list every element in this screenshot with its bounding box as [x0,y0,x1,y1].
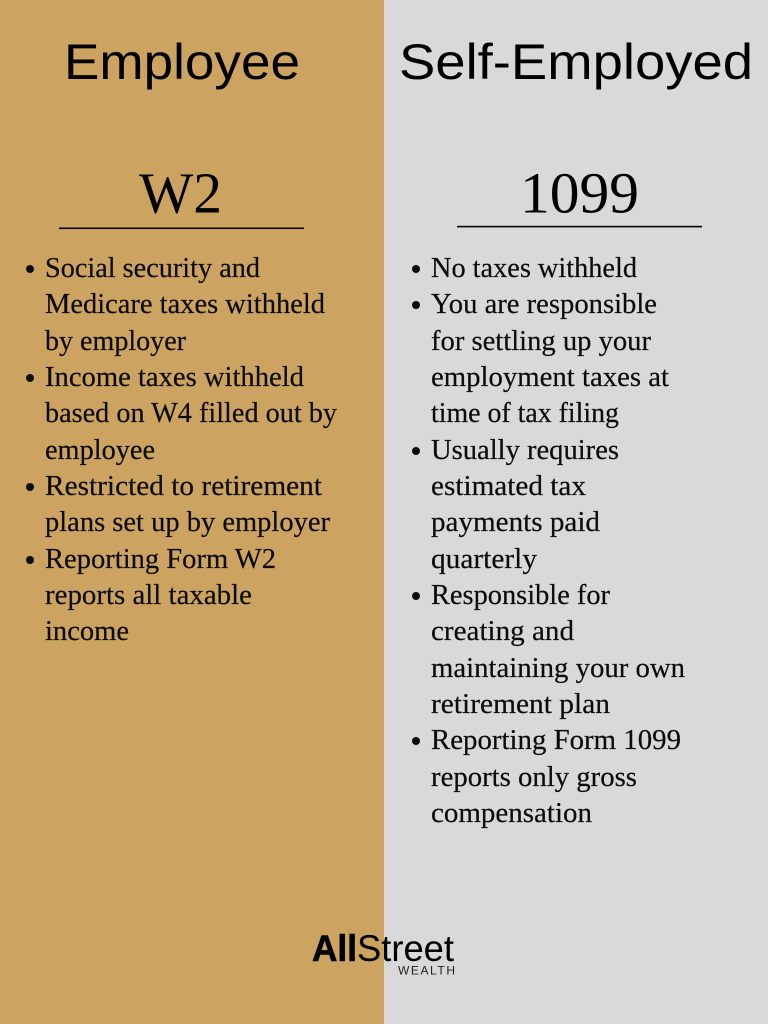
text block: 1099 bullet list: time of tax filing [431,398,619,429]
text block: W2 bullet list: employee [45,435,155,466]
text block: W2 bullet list: reports all taxable [45,580,252,611]
text block: W2 bullet list: Medicare taxes withheld [45,289,325,320]
text block: W2 bullet list [26,253,337,647]
text block: 1099 bullet list: You are responsible [431,289,657,320]
divider under 1099 [457,226,702,227]
subheading: W2: W2 [139,160,222,226]
text block: 1099 bullet list: Responsible for [431,580,611,611]
text block: 1099 bullet list: maintaining your own [431,653,685,684]
logo: AllStreet Wealth: WEALTH [398,964,455,978]
text block: W2 bullet list: Social security and [45,253,260,284]
text block: W2 bullet list: Restricted to retirement [45,471,322,502]
text block: W2 bullet list: Reporting Form W2 [45,544,276,575]
text block: W2 bullet list: plans set up by employer [45,507,331,538]
text block: 1099 bullet list: estimated tax [431,471,586,502]
text block: 1099 bullet list [412,253,685,829]
divider under W2 [59,228,304,229]
text block: W2 bullet list: income [45,616,129,647]
text block: 1099 bullet list: payments paid [431,507,600,538]
text block: 1099 bullet list: creating and [431,616,574,647]
logo: AllStreet Wealth: All [312,928,357,969]
logo: AllStreet Wealth [312,928,455,978]
text block: 1099 bullet list: No taxes withheld [431,253,637,284]
text block: W2 bullet list: by employer [45,326,187,357]
text block: 1099 bullet list: Reporting Form 1099 [431,725,681,756]
subheading: 1099: 1099 [520,160,639,226]
text block: 1099 bullet list: quarterly [431,544,537,575]
text block: 1099 bullet list: reports only gross [431,762,637,793]
text block: W2 bullet list: based on W4 filled out by [45,398,337,429]
heading: Self-Employed: Self-Employed [399,34,753,90]
text block: 1099 bullet list: Usually requires [431,435,619,466]
text block: 1099 bullet list: for settling up your [431,326,652,357]
text block: 1099 bullet list: compensation [431,798,592,829]
panel: employee background [0,0,384,1024]
text block: W2 bullet list: Income taxes withheld [45,362,304,393]
logo: AllStreet Wealth: Street [357,928,455,969]
text block: 1099 bullet list: employment taxes at [431,362,669,393]
panel: self-employed background [384,0,768,1024]
heading: Employee: Employee [64,34,300,90]
text block: 1099 bullet list: retirement plan [431,689,610,720]
